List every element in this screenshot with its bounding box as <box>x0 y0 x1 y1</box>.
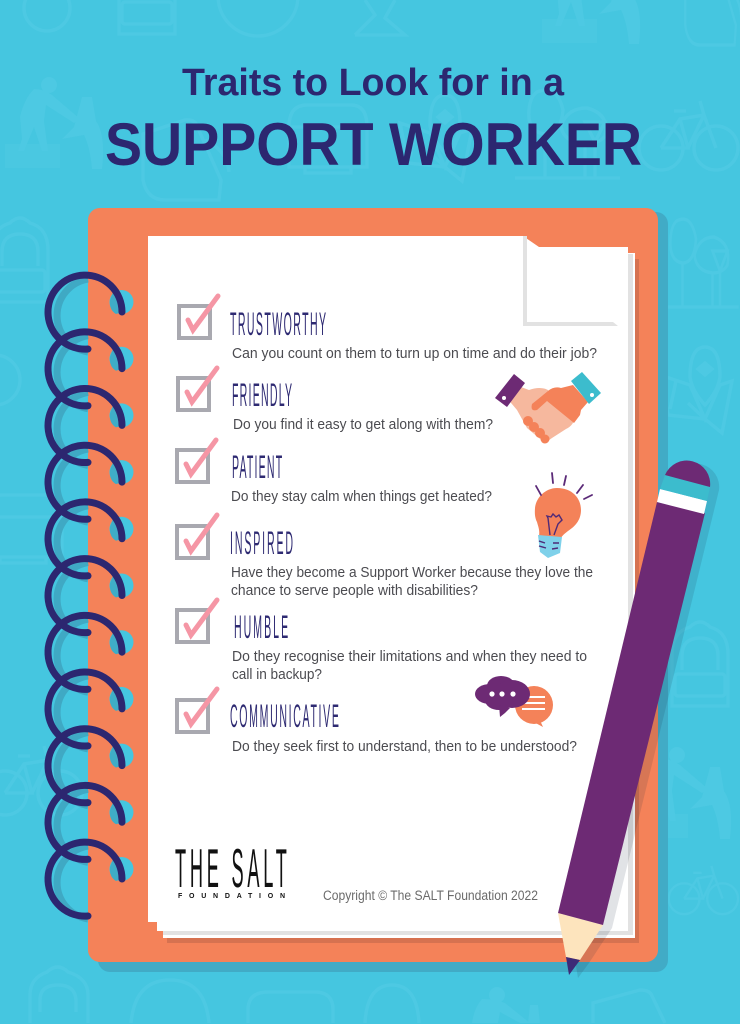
trait: patient <box>177 440 492 505</box>
trait: inspired <box>177 515 593 599</box>
checkbox <box>178 368 217 410</box>
description: Can you count on them to turn up on time and do their job? <box>232 346 597 362</box>
title line 1: Traits to Look for in a <box>182 62 565 104</box>
checkbox <box>177 600 217 642</box>
pencil body <box>558 502 705 925</box>
white band <box>657 489 707 514</box>
trait: friendly <box>178 368 493 433</box>
trait: humble <box>177 600 587 683</box>
description line 2: chance to serve people with disabilities? <box>231 583 478 599</box>
description: Do they recognise their limitations and when they need to <box>232 649 587 665</box>
description: Have they become a Support Worker because they love the <box>231 565 593 581</box>
wood tip <box>558 913 603 960</box>
heading: TRUSTWORTHY <box>230 307 326 343</box>
icon: handshake <box>495 372 601 444</box>
paper stack <box>148 236 639 943</box>
spiral binding <box>48 275 133 919</box>
description line 2: call in backup? <box>232 667 322 683</box>
checkbox <box>177 689 217 732</box>
eraser cap <box>665 461 710 487</box>
checkbox <box>179 296 218 338</box>
heading: HUMBLE <box>234 610 288 646</box>
logo: the salt foundation: FOUNDATION <box>178 893 285 900</box>
heading: FRIENDLY <box>232 378 292 414</box>
description: Do they stay calm when things get heated? <box>231 489 492 505</box>
pencil <box>558 461 710 975</box>
logo: the salt foundation: THE SALT <box>175 837 287 899</box>
description: Do you find it easy to get along with them? <box>233 417 493 433</box>
notebook shadow <box>98 212 668 972</box>
heading: INSPIRED <box>230 526 293 562</box>
trait: trustworthy <box>179 296 597 362</box>
icon: light bulb <box>535 473 592 558</box>
teal band <box>660 475 710 501</box>
description: Do they seek first to understand, then to be understood? <box>232 739 577 755</box>
title line 2: SUPPORT WORKER <box>105 111 642 178</box>
heading: COMMUNICATIVE <box>230 699 339 735</box>
checkbox <box>177 440 216 482</box>
icon: speech bubbles <box>475 676 553 727</box>
pencil shadow <box>567 464 719 978</box>
copyright: Copyright © The SALT Foundation 2022 <box>323 888 538 903</box>
title <box>105 62 642 178</box>
trait: communicative <box>177 689 577 755</box>
heading: PATIENT <box>232 450 282 486</box>
checkbox <box>177 515 217 558</box>
notebook cover <box>88 208 658 962</box>
lead <box>566 957 580 975</box>
